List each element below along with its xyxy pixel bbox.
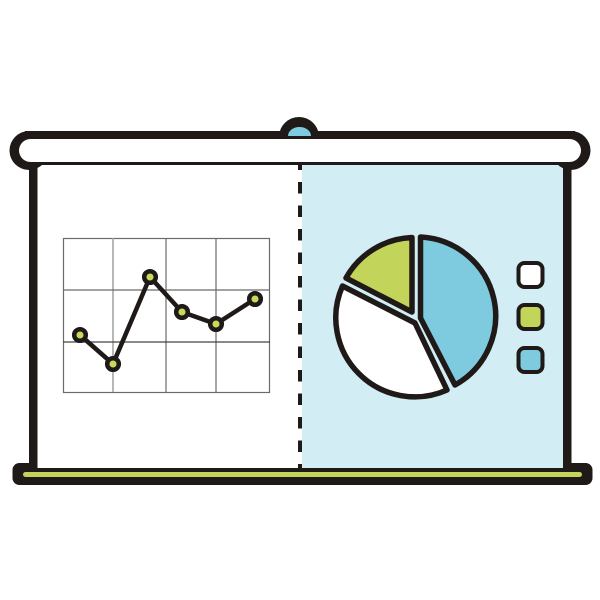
slice: white xyxy=(336,286,447,397)
top roller bar xyxy=(10,131,590,170)
legend swatch: white xyxy=(518,263,542,287)
legend swatch: blue xyxy=(518,348,542,372)
icon: top knob xyxy=(279,117,319,139)
data line xyxy=(80,277,255,364)
panel: left white screen xyxy=(38,160,302,468)
panel: right blue screen xyxy=(302,160,563,468)
line chart xyxy=(63,238,270,392)
data points xyxy=(74,271,261,370)
legend xyxy=(518,263,542,372)
legend swatch: green xyxy=(518,305,542,329)
projection screen xyxy=(29,158,572,470)
bottom green bar xyxy=(12,463,592,485)
slice: blue xyxy=(420,237,496,385)
right post xyxy=(563,160,572,470)
chart grid xyxy=(63,238,270,392)
left post xyxy=(29,160,38,470)
dashed divider xyxy=(298,158,302,468)
pie chart xyxy=(336,237,496,397)
slice: green xyxy=(346,238,412,312)
